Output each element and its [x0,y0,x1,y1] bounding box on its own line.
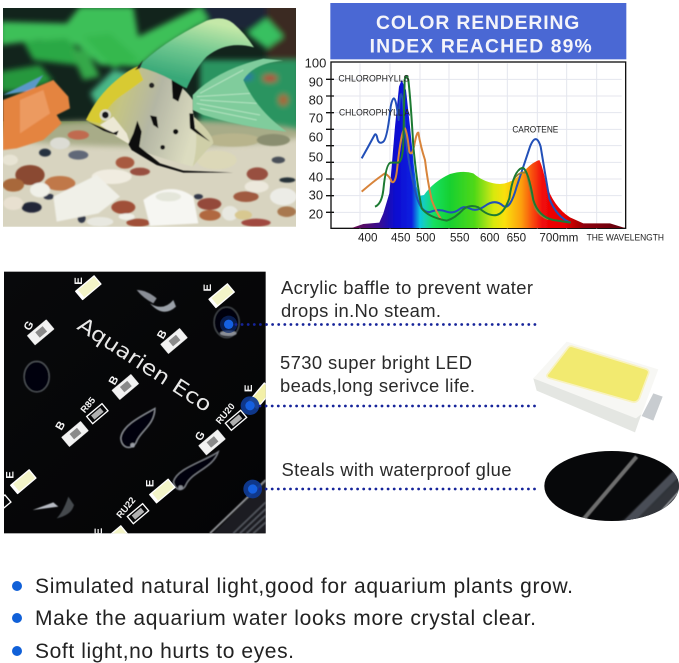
chart: light spectrum versus wavelength: 20 [309,206,323,221]
bullet: natural light: Simulated natural light,good for aquarium plants grow. [35,575,573,598]
chart: light spectrum versus wavelength: 30 [309,187,323,202]
photo: angelfish in aquarium [0,0,307,230]
green curve [375,76,571,223]
chart: light spectrum versus wavelength: 700mm [539,232,578,245]
silkscreen labels: RU22 [115,495,137,520]
banner: color rendering index: INDEX REACHED 89% [370,36,592,57]
silkscreen labels: B [155,328,170,341]
silkscreen labels: E [243,384,255,392]
silkscreen labels: E [202,283,214,291]
chart: light spectrum versus wavelength: 100 [305,56,326,71]
callout: acrylic baffle [236,277,535,324]
chart: light spectrum versus wavelength: 650 [507,232,527,245]
chart: light spectrum versus wavelength: 60 [309,130,323,145]
chart: light spectrum versus wavelength: CHLOROPHYLL A [339,108,410,118]
chart: light spectrum versus wavelength: 500 [416,232,436,245]
icon: LED bead close-up [533,342,663,432]
callout: waterproof glue: Steals with waterproof glue [282,459,512,480]
silkscreen labels: E [73,277,85,285]
bullet: crystal clear water: Make the aquarium water looks more crystal clear. [35,607,536,630]
silkscreen labels: E [145,479,157,487]
chart: light spectrum versus wavelength: THE WAVELENGTH [587,232,664,242]
silkscreen labels: G [193,429,208,443]
banner: color rendering index [330,3,626,59]
chart: light spectrum versus wavelength: CHLOROPHYLLS [338,73,409,83]
water drops [24,290,239,518]
spectrum area [352,80,625,228]
callout: acrylic baffle: drops in.No steam. [281,300,441,321]
callout: 5730 LED beads: 5730 super bright LED [280,352,472,373]
chart: light spectrum versus wavelength: 450 [391,232,411,245]
blue curve [362,94,571,223]
chart: light spectrum versus wavelength: 400 [358,232,378,245]
silkscreen labels: G [22,319,37,333]
brand text: Aquarien Eco [73,312,216,417]
fish [86,18,287,173]
chart: light spectrum versus wavelength: 550 [450,232,470,245]
silkscreen labels: RU20 [214,401,237,426]
chart: light spectrum versus wavelength: 90 [309,75,323,90]
bullet: soft light: Soft light,no hurts to eyes. [35,640,294,663]
silkscreen labels [5,277,255,535]
resistor outlines [0,404,247,524]
silkscreen labels: B [54,419,68,433]
silkscreen labels: R85 [79,395,97,415]
chart: light spectrum versus wavelength: 70 [309,111,323,126]
callout: acrylic baffle: Acrylic baffle to prevent water [281,277,533,298]
callout: 5730 LED beads: beads,long serivce life. [280,375,475,396]
chart: light spectrum versus wavelength: 40 [309,170,323,185]
chart: light spectrum versus wavelength: 80 [309,93,323,108]
small RGB chips [27,319,226,455]
silkscreen labels: B [107,374,121,387]
silkscreen labels: E [5,471,17,479]
bullet list: benefits [12,575,573,663]
icon: glue seal close-up [544,451,679,527]
silkscreen labels: E [93,527,105,535]
chart: light spectrum versus wavelength: CAROTENE [512,125,558,135]
white LED chips [10,275,273,550]
orange curve [362,128,442,220]
chart: light spectrum versus wavelength [305,56,664,245]
axis ticks [326,79,334,212]
panel: black LED circuit board [0,272,273,550]
chart: light spectrum versus wavelength: 600 [480,232,500,245]
chart: light spectrum versus wavelength: 50 [309,150,323,165]
callout: 5730 LED beads [260,352,537,406]
blue marker dots [220,316,262,498]
banner: color rendering index: COLOR RENDERING [376,13,579,34]
glue strip corner [210,480,266,533]
